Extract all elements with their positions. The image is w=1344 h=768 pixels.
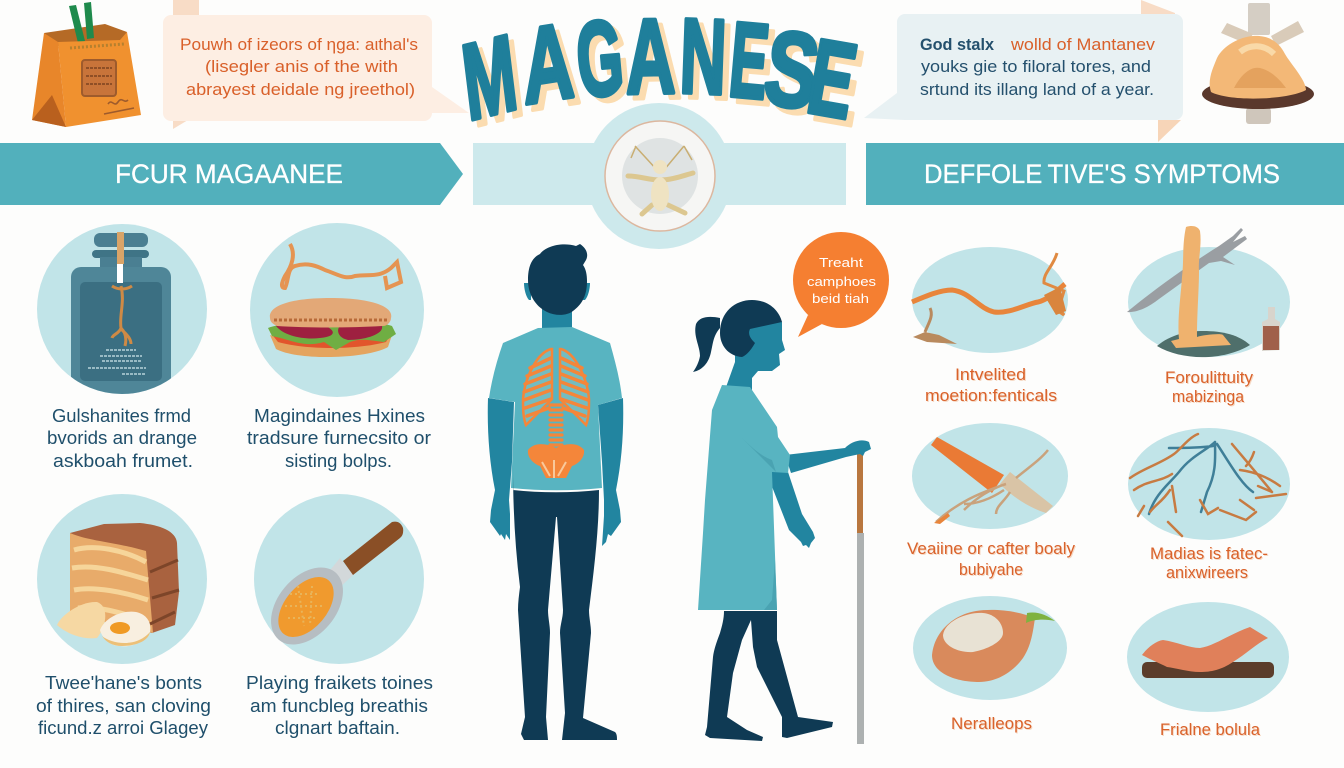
- callout: right speech box: srtund its illang land of a year.: [920, 80, 1154, 99]
- callout: left speech box: [163, 0, 469, 129]
- title: E: [806, 24, 870, 148]
- text: cake caption: of thires, san cloving: [36, 695, 211, 716]
- panel: symptom branching nerves: [1128, 428, 1290, 540]
- cane: [857, 450, 864, 744]
- panel: food item spoon: [254, 494, 424, 664]
- title: N: [684, 1, 734, 122]
- text: spoon caption: am funcbleg breathis: [250, 695, 428, 716]
- text: cake caption: Twee'hane's bonts: [45, 672, 202, 693]
- icon: dough on a plate: [1202, 3, 1314, 124]
- text: root caption: [907, 540, 1076, 579]
- woman's dress: [698, 385, 790, 610]
- text: fruit caption: Neralleops: [951, 715, 1032, 733]
- woman's legs: [705, 611, 833, 741]
- figure: standing man with skeleton: [488, 244, 623, 740]
- panel: symptom salmon strip: [1127, 602, 1289, 712]
- text: tools caption: mabizinga: [1172, 388, 1245, 406]
- banner: centre with plate: [473, 103, 846, 249]
- icon: burger: [268, 298, 396, 357]
- text: tools caption: [1165, 369, 1254, 406]
- text: cake caption: ficund.z arroi Glagey: [38, 717, 209, 738]
- man's arms: [488, 398, 623, 546]
- text: spoon caption: clgnart baftain.: [275, 717, 400, 738]
- title: S: [758, 8, 826, 132]
- text: spoon caption: Playing fraikets toines: [246, 672, 433, 693]
- banner: left heading: FCUR MAGAANEE: [115, 159, 343, 189]
- text: salmon caption: Frialne bolula: [1160, 721, 1261, 739]
- text: cake caption: [36, 672, 211, 738]
- panel: food item jar: [37, 224, 207, 397]
- text: jar caption: bvorids an drange: [47, 427, 197, 448]
- woman's front arm: [785, 440, 871, 473]
- woman's ponytail: [693, 317, 720, 372]
- text: burger caption: Magindaines Hxines: [254, 405, 425, 426]
- man's head and neck: [536, 305, 578, 332]
- text: spoon caption: [246, 672, 433, 738]
- callout: right speech box: [864, 0, 1183, 142]
- callout: orange speech bubble: Treaht: [819, 255, 863, 270]
- icon: orange swirl: [282, 244, 401, 288]
- title: G: [572, 0, 628, 120]
- callout: orange speech bubble: camphoes: [807, 274, 877, 289]
- icon: carrot root: [931, 437, 1053, 524]
- title: G: [578, 3, 634, 125]
- text: burger caption: tradsure furnecsito or: [247, 427, 431, 448]
- title: E: [800, 17, 864, 141]
- title: [456, 0, 870, 149]
- banner: right heading: DEFFOLE TIVE'S SYMPTOMS: [924, 159, 1280, 189]
- icon: knife, bar and bottle: [1127, 226, 1280, 357]
- text: burger caption: sisting bolps.: [285, 450, 392, 471]
- title: N: [678, 0, 728, 117]
- woman's hair: [720, 300, 782, 357]
- text: root caption: Veaiine or cafter boaly: [907, 540, 1076, 558]
- text: root caption: bubiyahe: [959, 561, 1023, 579]
- icon: branching roots: [1130, 434, 1286, 536]
- text: nerves caption: Madias is fatec-: [1150, 545, 1268, 563]
- title: A: [526, 7, 582, 134]
- callout: left speech box: (lisegler anis of the with: [205, 57, 398, 76]
- panel: symptom tools: [1127, 226, 1290, 357]
- banner: right heading: [866, 143, 1344, 205]
- callout: left speech box: abrayest deidale ng jreethol): [186, 80, 415, 99]
- callout: orange speech bubble: beid tiah: [812, 291, 869, 306]
- icon: orange shopping bag: [32, 2, 141, 127]
- icon: orange nerve strand: [912, 253, 1066, 344]
- figure: woman walking with cane: [693, 300, 871, 744]
- text: nerve caption: moetion:fenticals: [925, 387, 1057, 405]
- callout: left speech box: Pouwh of izeors of ηga: aιthal's: [180, 35, 418, 54]
- panel: symptom root: [912, 423, 1068, 529]
- panel: food item burger: [250, 223, 424, 397]
- icon: spoon with orange grains: [257, 522, 403, 658]
- panel: symptom nerve: [912, 247, 1068, 353]
- title: M: [462, 17, 529, 149]
- woman's neck and face: [725, 318, 785, 390]
- panel: symptom fruit: [913, 596, 1067, 700]
- callout: orange speech bubble: [793, 232, 889, 337]
- text: jar caption: askboah frumet.: [53, 450, 193, 471]
- icon: strip on wooden board: [1142, 627, 1274, 678]
- pelvis: [528, 444, 584, 478]
- icon: halved fruit: [932, 610, 1055, 682]
- text: nerves caption: anixwireers: [1166, 564, 1248, 582]
- text: jar caption: [47, 405, 197, 471]
- woman's back arm: [771, 472, 815, 548]
- text: jar caption: Gulshanites frmd: [52, 405, 191, 426]
- title: A: [520, 1, 576, 128]
- text: nerves caption: [1150, 545, 1268, 582]
- icon: jar: [71, 232, 171, 397]
- man's trousers: [513, 467, 617, 740]
- callout: right speech box: God stalx: [920, 35, 995, 54]
- callout: right speech box: wolld of Mantanev: [1010, 35, 1156, 54]
- title: E: [725, 1, 773, 122]
- callout: right speech box: youks gie to filoral tores, and: [921, 57, 1151, 76]
- title: M: [456, 11, 523, 143]
- man's shirt: [489, 327, 622, 490]
- dress fold shading: [738, 434, 777, 610]
- panel: food item layered cake: [37, 494, 207, 664]
- banner: left heading: [0, 143, 463, 205]
- text: burger caption: [247, 405, 431, 471]
- title: S: [764, 14, 832, 138]
- skeleton: ribs and spine: [523, 349, 589, 445]
- text: tools caption: Foroulittuity: [1165, 369, 1254, 387]
- text: nerve caption: Intvelited: [955, 366, 1026, 384]
- title: E: [731, 7, 779, 128]
- text: nerve caption: [925, 366, 1057, 405]
- icon: cake and egg: [57, 523, 179, 646]
- icon: plate with figure: [605, 121, 715, 231]
- title: A: [631, 1, 682, 121]
